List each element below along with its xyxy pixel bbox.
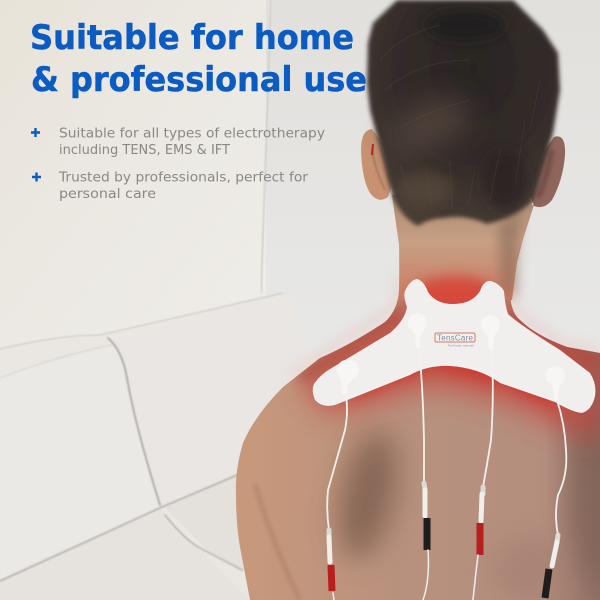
hair xyxy=(367,0,560,226)
logo on pad xyxy=(435,333,475,348)
wire 2 with black connector xyxy=(419,345,428,600)
bullet 2: Trusted by professionals, perfect for xyxy=(58,170,308,186)
neck xyxy=(392,195,534,312)
sofa back cushion right xyxy=(115,298,302,505)
electrode pad xyxy=(313,279,595,413)
bullet 2 xyxy=(32,170,308,202)
person: back and shoulders xyxy=(236,200,600,600)
sofa seat xyxy=(0,510,250,600)
logo on pad: TensCare xyxy=(437,334,474,342)
snap 4 xyxy=(546,366,565,400)
right ear xyxy=(530,136,565,207)
wire 1 with red connector xyxy=(327,390,347,600)
sofa back cushion left xyxy=(0,345,159,578)
red glow xyxy=(300,300,600,440)
snap 2 xyxy=(408,313,427,348)
bullet list xyxy=(31,126,325,202)
left ear xyxy=(361,129,392,200)
wire 3 with red connector xyxy=(473,350,493,600)
title xyxy=(30,18,367,99)
sofa xyxy=(0,293,320,600)
pink glow on wall around shoulders xyxy=(290,275,600,378)
snap 1 xyxy=(337,360,359,394)
shading on back xyxy=(329,426,407,564)
electrode snaps xyxy=(337,313,565,400)
title: Suitable for home xyxy=(30,18,354,57)
bullet 2: personal care xyxy=(59,186,156,202)
wire 4 with black connector xyxy=(545,400,566,598)
title: & professional use xyxy=(31,60,367,99)
logo on pad: Feel better naturally xyxy=(448,344,475,348)
bullet 1: Suitable for all types of electrotherapy xyxy=(59,126,325,142)
bullet 1 xyxy=(31,126,325,158)
ears xyxy=(361,129,565,207)
snap 3 xyxy=(481,315,500,350)
bullet 1: including TENS, EMS & IFT xyxy=(59,142,231,158)
